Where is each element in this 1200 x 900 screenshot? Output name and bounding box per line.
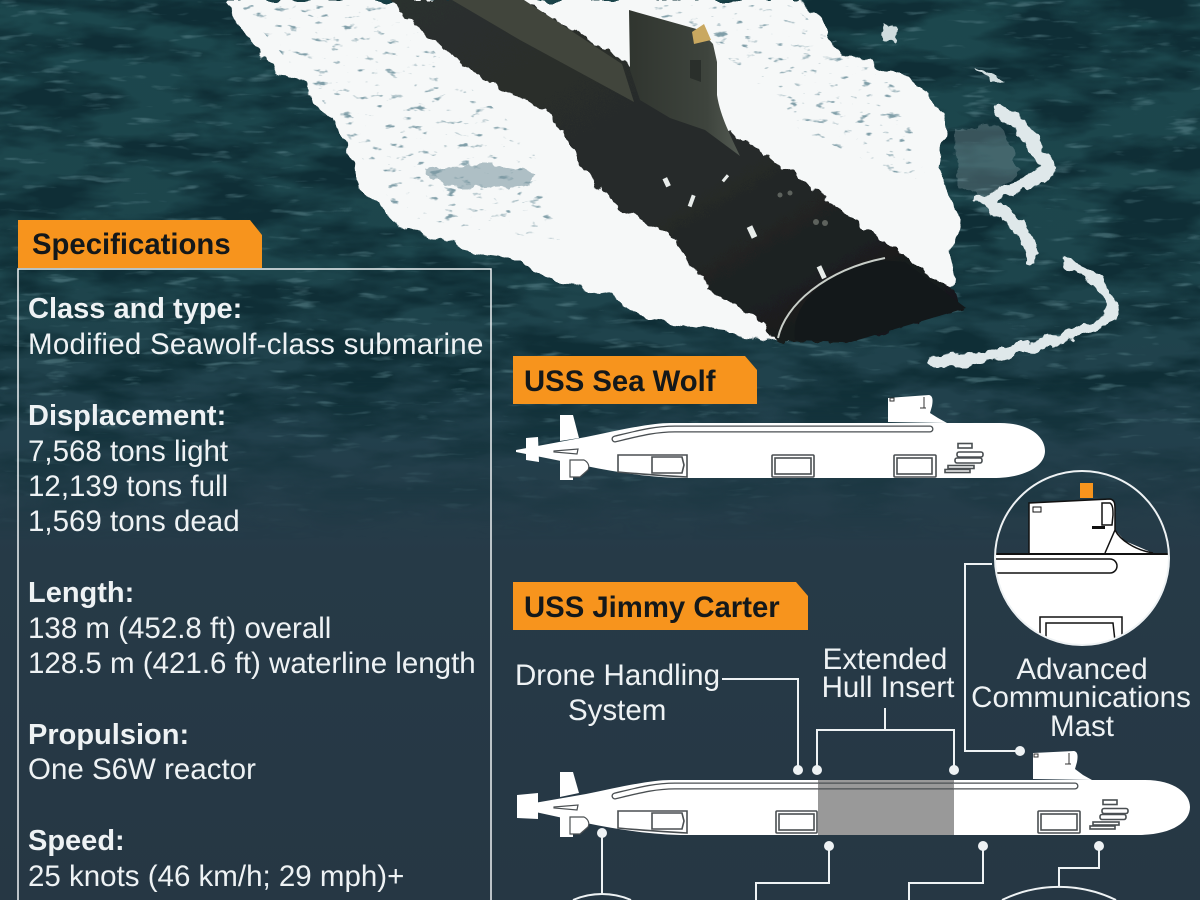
callout: forward hull pointer: [909, 841, 988, 900]
callout: extended hull insert: Extended: [823, 643, 947, 676]
diagram: USS Jimmy Carter submarine: [517, 751, 1190, 837]
wave ribbons right: [882, 24, 1112, 362]
diagram: USS Sea Wolf submarine: [516, 395, 1045, 480]
sail: [888, 395, 947, 423]
damaged mast tip: [692, 24, 711, 44]
ocean wave texture: [0, 0, 1200, 497]
callout: advanced communications mast: Advanced: [1016, 653, 1148, 686]
spec: displacement: 7,568 tons light: [28, 435, 228, 468]
spec: propulsion: Propulsion:: [28, 719, 189, 751]
spec: speed: 25 knots (46 km/h; 29 mph)+: [28, 860, 404, 893]
hull windows: [618, 455, 936, 477]
sail: [1033, 751, 1092, 780]
callout: stern pointer and circle: [573, 828, 631, 900]
top tube: [615, 786, 1075, 796]
spec: displacement: 12,139 tons full: [28, 470, 228, 503]
callout: midship pointer: [756, 841, 834, 900]
specifications heading tab: Specifications: [32, 228, 231, 261]
callout: drone handling system: Drone Handling: [515, 659, 720, 692]
hull windows: [618, 811, 1080, 833]
sail details: [890, 397, 926, 408]
foam speckle: [240, 5, 930, 240]
upper deck: [452, 0, 634, 102]
callout: advanced communications mast: Mast: [1050, 710, 1114, 743]
propulsor: [570, 460, 589, 477]
callout: drone handling system: [515, 659, 803, 775]
extended hull insert: [818, 780, 954, 835]
bow details: [945, 444, 983, 472]
sail: [629, 10, 740, 156]
propulsor: [570, 817, 589, 834]
callout: advanced communications mast: [965, 471, 1191, 756]
callout: extended hull insert: [812, 643, 959, 775]
rudder and fins: [526, 415, 579, 480]
spec: class and type: Class and type:: [28, 293, 242, 325]
bow details: [1090, 800, 1128, 829]
sail window: [690, 60, 701, 82]
photo: submarine surfacing: [225, 0, 1112, 362]
spec: displacement: Displacement:: [28, 400, 226, 432]
heading: USS Sea Wolf: [513, 356, 757, 404]
spec: length: Length:: [28, 577, 134, 609]
specifications frame: [18, 269, 491, 900]
shaded foam patch: [425, 164, 535, 188]
rudder and fins: [517, 772, 579, 837]
orange mast: [1080, 483, 1093, 498]
sail details: [1034, 753, 1071, 764]
hull markings: [662, 174, 827, 279]
callout: advanced communications mast: Communications: [971, 681, 1191, 714]
specifications heading tab: [18, 220, 262, 268]
spec: length: 138 m (452.8 ft) overall: [28, 612, 331, 645]
callout: bow pointer and circle: [1002, 841, 1116, 900]
foam wake: [225, 0, 958, 340]
spec: propulsion: One S6W reactor: [28, 753, 256, 786]
callout: drone handling system: System: [568, 694, 666, 727]
spec: class and type: Modified Seawolf-class submarine: [28, 328, 484, 361]
hull: [516, 423, 1045, 478]
magnified sail circle: [994, 470, 1170, 646]
spec: displacement: 1,569 tons dead: [28, 505, 240, 538]
heading: USS Jimmy Carter: USS Jimmy Carter: [524, 591, 780, 624]
submarine hull: [389, 0, 966, 342]
callout: extended hull insert: Hull Insert: [822, 671, 954, 704]
heading: USS Sea Wolf: USS Sea Wolf: [524, 365, 716, 398]
top tube: [615, 429, 930, 439]
spec: speed: Speed:: [28, 825, 125, 857]
panel: specifications: [18, 220, 491, 900]
spec: length: 128.5 m (421.6 ft) waterline length: [28, 647, 476, 680]
hull: [517, 780, 1190, 835]
heading: USS Jimmy Carter: [513, 582, 808, 630]
stern section: [795, 260, 966, 342]
